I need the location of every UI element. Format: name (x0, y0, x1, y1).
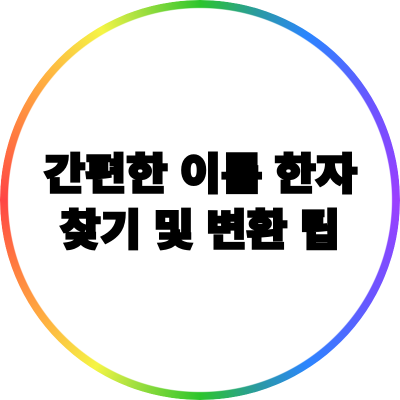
title: 찾기 및 변환 팁 (60, 208, 340, 255)
title: 간편한 이름 한자 (44, 152, 357, 199)
